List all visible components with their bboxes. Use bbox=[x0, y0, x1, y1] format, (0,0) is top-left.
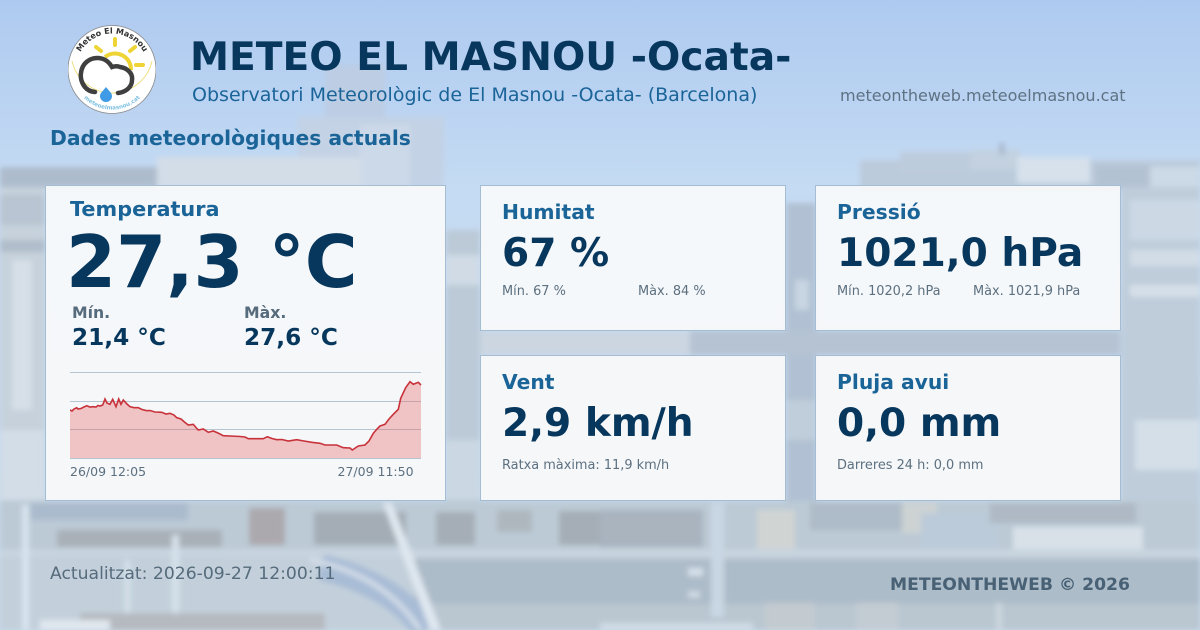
logo bbox=[68, 25, 156, 114]
temperature heading: Temperatura bbox=[70, 197, 220, 221]
rain heading: Pluja avui bbox=[837, 370, 949, 394]
maximum temperature: 27,6 °C bbox=[244, 324, 338, 350]
wind value: 2,9 km/h bbox=[502, 401, 694, 446]
panel: temperature bbox=[45, 185, 446, 501]
logo: meteoelmasnou.cat bbox=[84, 96, 140, 110]
website url: meteontheweb.meteoelmasnou.cat bbox=[840, 86, 1126, 105]
rain last 24 hours: Darreres 24 h: 0,0 mm bbox=[837, 458, 983, 472]
humidity maximum: Màx. 84 % bbox=[638, 284, 706, 298]
logo: Meteo El Masnou bbox=[76, 27, 147, 52]
humidity heading: Humitat bbox=[502, 200, 595, 224]
temperature value: 27,3 °C bbox=[66, 220, 358, 304]
title: METEO EL MASNOU -Ocata- bbox=[190, 34, 791, 80]
chart end time: 27/09 11:50 bbox=[338, 464, 414, 479]
rain value: 0,0 mm bbox=[837, 401, 1001, 446]
maximum temperature: Màx. bbox=[244, 303, 286, 322]
humidity value: 67 % bbox=[502, 231, 609, 276]
pressure heading: Pressió bbox=[837, 200, 921, 224]
subtitle: Observatori Meteorològic de El Masnou -Ocata- (Barcelona) bbox=[192, 84, 757, 106]
footer brand: METEONTHEWEB © 2026 bbox=[890, 574, 1130, 594]
pressure minimum: Mín. 1020,2 hPa bbox=[837, 284, 941, 298]
pressure maximum: Màx. 1021,9 hPa bbox=[973, 284, 1080, 298]
panel: wind bbox=[480, 355, 786, 501]
panel: rain bbox=[815, 355, 1121, 501]
section heading: Dades meteorològiques actuals bbox=[50, 126, 411, 150]
minimum temperature: 21,4 °C bbox=[72, 324, 166, 350]
wind heading: Vent bbox=[502, 370, 554, 394]
update timestamp: Actualitzat: 2026-09-27 12:00:11 bbox=[50, 564, 335, 584]
humidity minimum: Mín. 67 % bbox=[502, 284, 566, 298]
temperature chart bbox=[70, 372, 422, 459]
panel: humidity bbox=[480, 185, 786, 331]
minimum temperature bbox=[72, 303, 166, 350]
panel: pressure bbox=[815, 185, 1121, 331]
wind gust: Ratxa màxima: 11,9 km/h bbox=[502, 458, 669, 472]
minimum temperature: Mín. bbox=[72, 303, 110, 322]
pressure value: 1021,0 hPa bbox=[837, 231, 1083, 276]
maximum temperature bbox=[244, 303, 338, 350]
chart start time: 26/09 12:05 bbox=[70, 464, 146, 479]
